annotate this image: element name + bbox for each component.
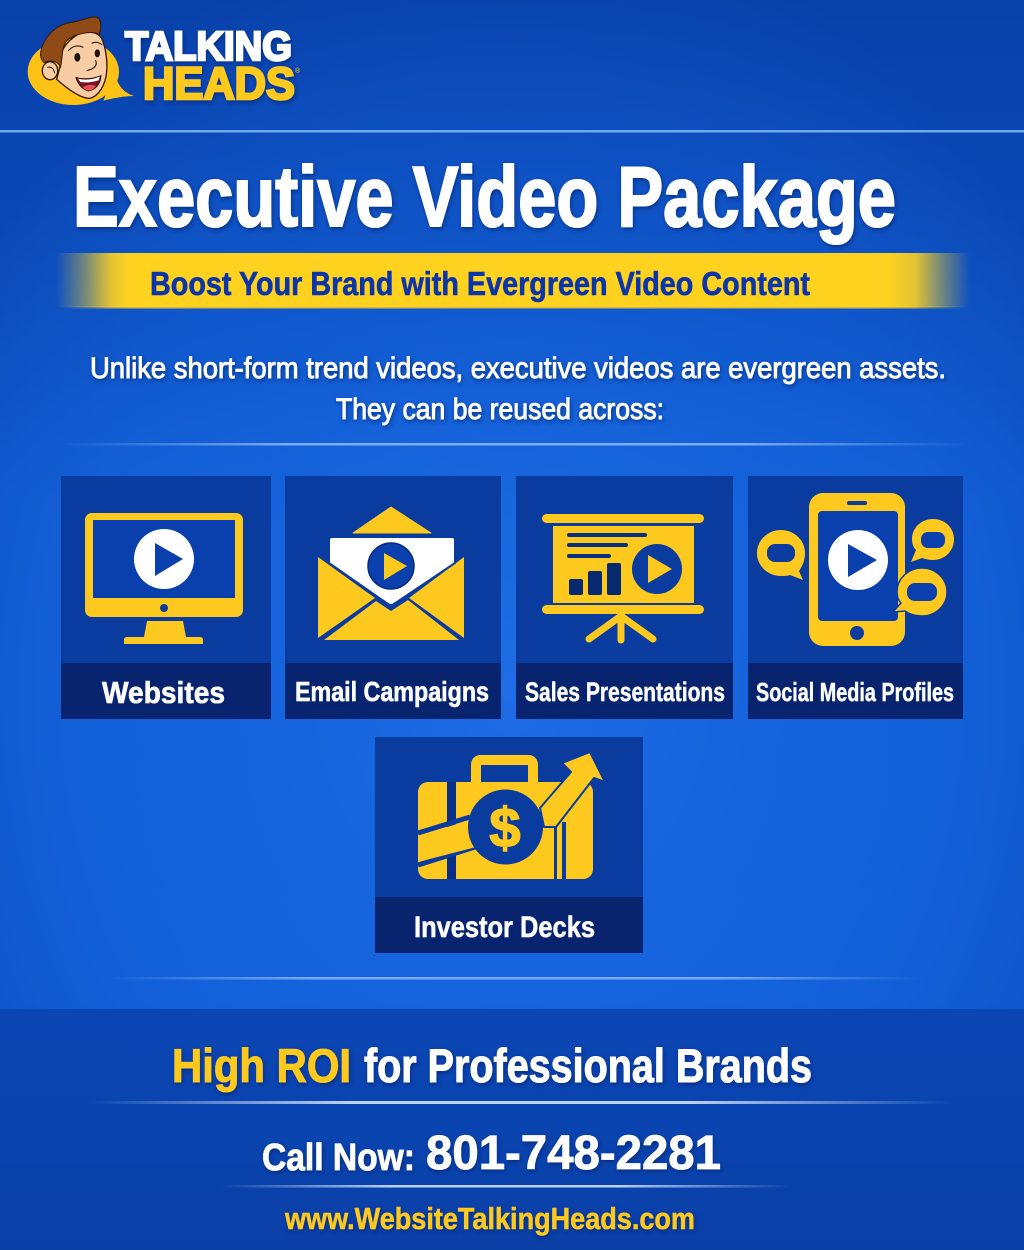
icon: briefcase with growth arrow: $ <box>489 796 521 859</box>
logo wordmark <box>125 23 301 109</box>
logo wordmark: ® <box>295 67 301 75</box>
footer headline <box>172 1039 812 1092</box>
label: Sales Presentations <box>525 677 725 707</box>
call to action phone <box>262 1127 721 1180</box>
label: Email Campaigns <box>295 676 489 707</box>
call to action phone: 801-748-2281 <box>426 1127 721 1180</box>
logo wordmark: HEADS <box>143 58 295 109</box>
logo wordmark: TALKING <box>125 23 292 69</box>
label: Investor Decks <box>414 911 595 944</box>
label: Social Media Profiles <box>756 677 954 707</box>
website url: www.WebsiteTalkingHeads.com <box>284 1201 695 1236</box>
panel: Social Media Profiles <box>748 476 963 719</box>
subtitle band <box>56 253 970 308</box>
footer headline: High ROI <box>172 1039 351 1092</box>
icon: speech bubble with cartoon head <box>28 17 134 105</box>
icon: monitor with play button <box>85 513 243 644</box>
subtitle band: Boost Your Brand with Evergreen Video Content <box>150 265 810 302</box>
icon: presentation board <box>542 514 704 640</box>
footer headline: for Professional Brands <box>364 1039 812 1092</box>
icon: envelope with play button <box>318 507 464 640</box>
header divider <box>0 130 1024 132</box>
panel: Websites <box>61 476 271 719</box>
intro text <box>90 352 946 426</box>
panel: Email Campaigns <box>285 476 501 719</box>
panel: Sales Presentations <box>516 476 733 719</box>
logo: Talking Heads <box>28 17 301 109</box>
intro text: They can be reused across: <box>336 393 664 426</box>
label: Websites <box>102 675 225 710</box>
icon: phone with chat bubbles <box>757 493 954 646</box>
icon: briefcase with growth arrow <box>418 752 605 879</box>
panel: Investor Decks <box>375 737 643 953</box>
intro text: Unlike short-form trend videos, executive videos are evergreen assets. <box>90 352 946 385</box>
footer panel <box>0 1009 1024 1250</box>
call to action phone: Call Now: <box>262 1137 415 1179</box>
